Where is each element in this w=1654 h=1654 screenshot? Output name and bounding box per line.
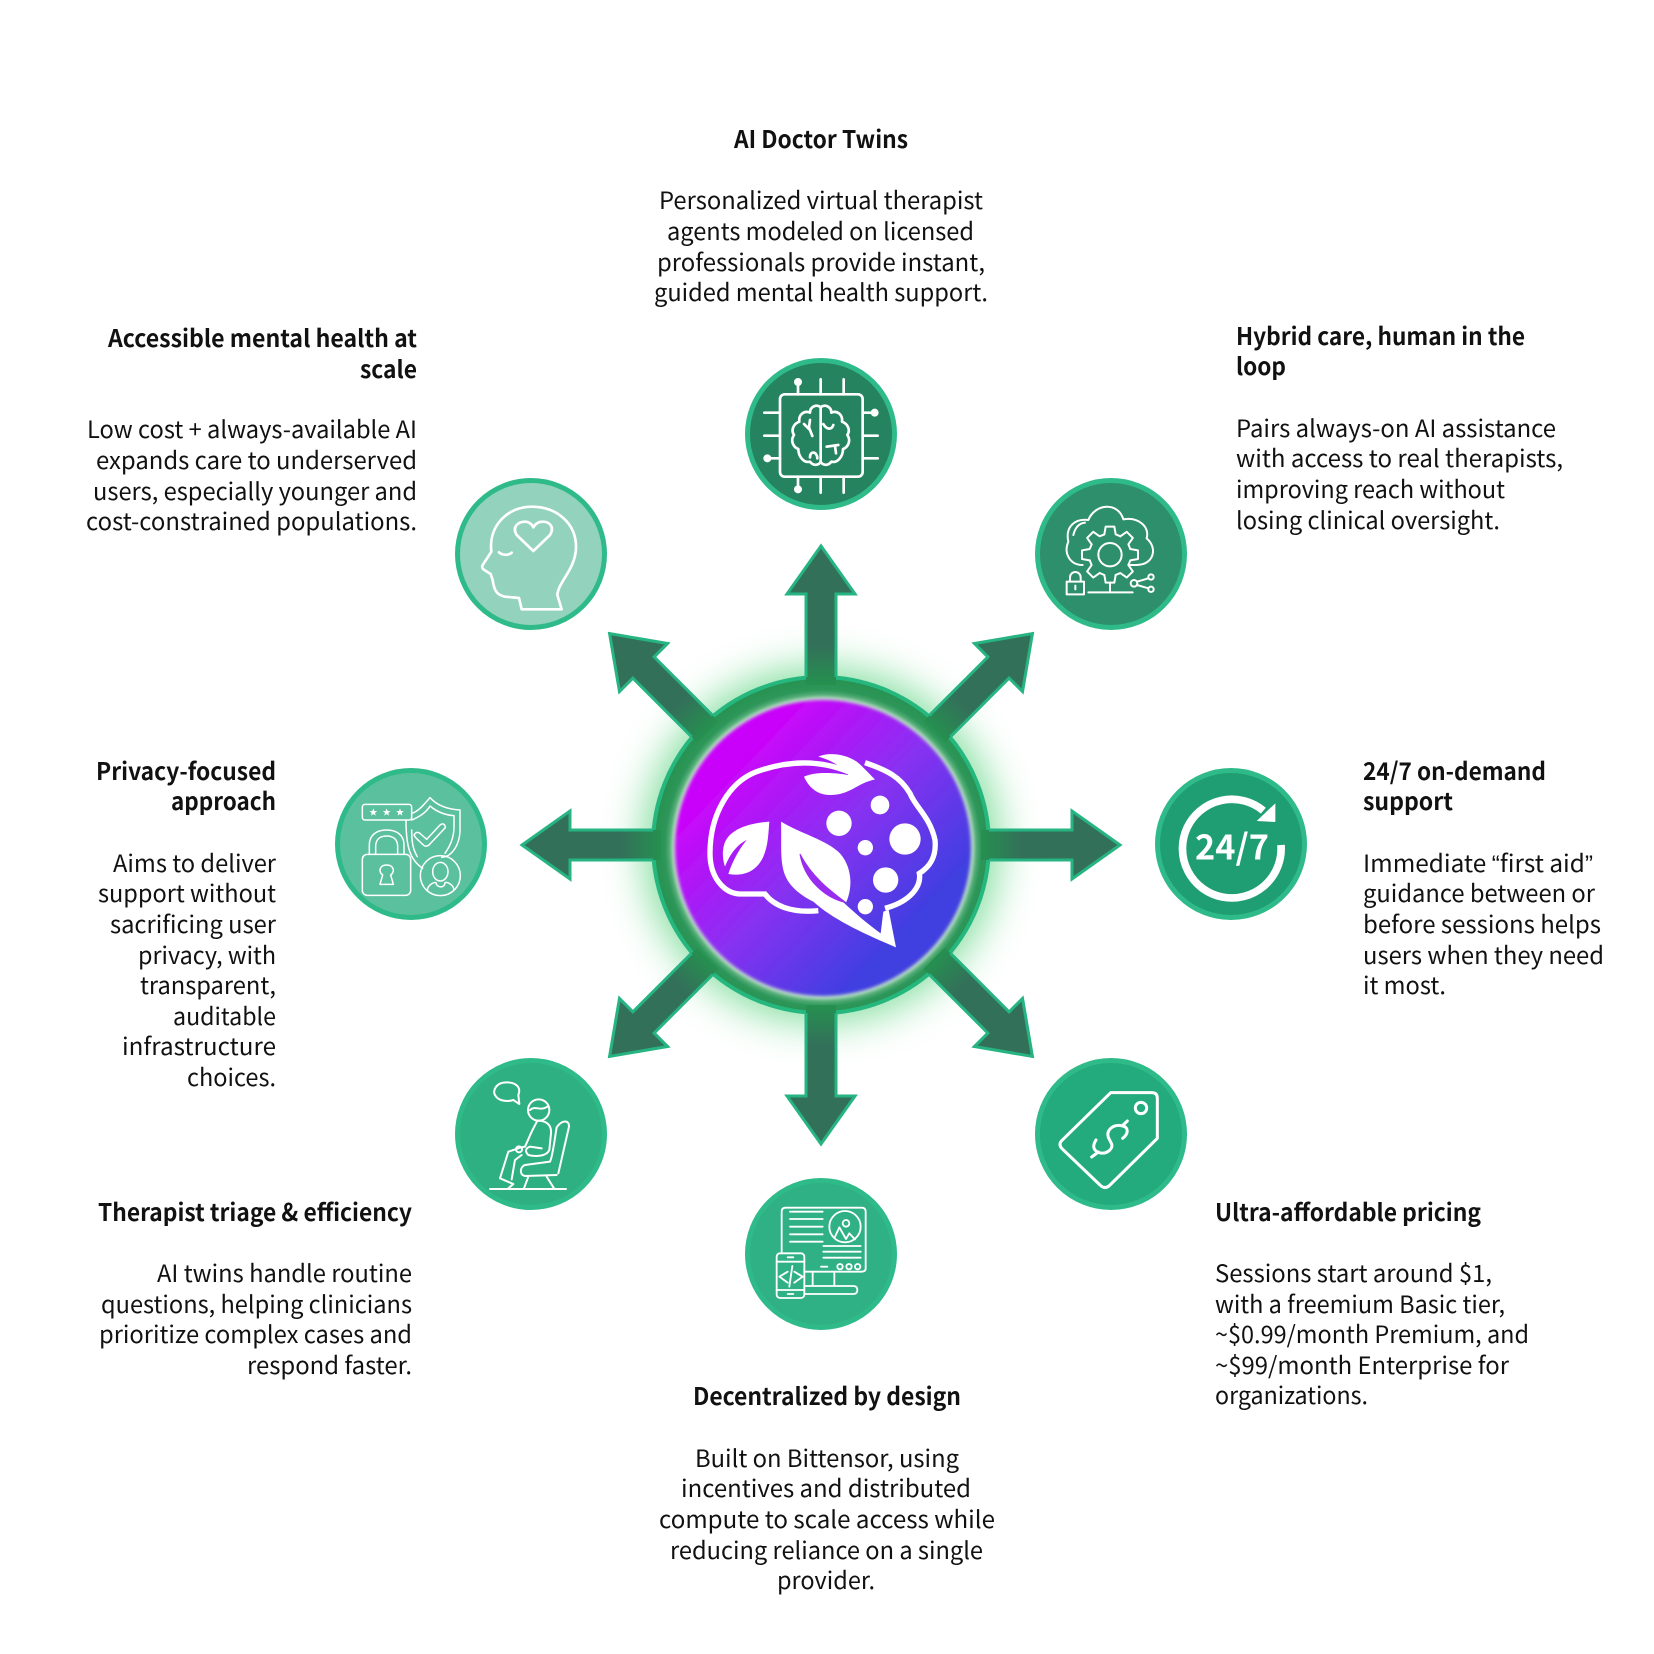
text block: 24/7 on-demand support: guidance between or	[1363, 874, 1596, 909]
heading: 24/7 on-demand support: 24/7 on-demand	[1363, 752, 1546, 787]
text block: Decentralized by design: incentives and distributed	[681, 1469, 971, 1504]
text block: Hybrid care: losing clinical oversight.	[1236, 501, 1500, 536]
arrow: north-west	[586, 610, 732, 756]
central purple disc	[672, 697, 974, 999]
text block: Privacy-focused approach: privacy, with	[138, 936, 276, 971]
icon: AI brain chip	[748, 360, 894, 508]
arrow: south-west	[586, 934, 732, 1080]
arrow: north-east	[910, 610, 1056, 756]
text block: Privacy-focused approach: support without	[98, 874, 276, 909]
heading: Accessible mental health at scale	[107, 319, 417, 385]
heading: Privacy-focused approach	[96, 752, 276, 817]
text block: 24/7 on-demand support: Immediate “first aid”	[1363, 844, 1593, 879]
icon: central brain and leaves logo	[710, 754, 935, 947]
text block: Ultra-affordable pricing: ~$99/month Enterprise for	[1215, 1346, 1510, 1381]
text block: Accessible mental health at scale	[86, 319, 417, 537]
text block: Hybrid care: improving reach without	[1236, 470, 1505, 505]
icon: 24/7 circular arrow	[1158, 770, 1304, 918]
text block: Therapist triage and efficiency	[98, 1193, 412, 1381]
text block: Decentralized by design: compute to scale access while	[659, 1500, 995, 1535]
central hub ring	[653, 677, 989, 1013]
text block: Accessible mental health at scale: expands care to underserved	[96, 441, 417, 476]
arrow: west	[522, 811, 661, 879]
heading: Privacy-focused approach: Privacy-focused	[96, 752, 276, 787]
text block: AI Doctor Twins: agents modeled on licensed	[667, 212, 974, 247]
text block: Decentralized by design	[659, 1377, 995, 1596]
text block: 24/7 on-demand support	[1363, 752, 1604, 1001]
text block: Hybrid care: with access to real therapists,	[1236, 439, 1563, 474]
icon: monitor and phone code	[748, 1180, 894, 1328]
icon: privacy lock and shield	[338, 770, 484, 918]
text block: Hybrid care	[1236, 317, 1563, 536]
text block: Ultra-affordable pricing: with a freemium Basic tier,	[1215, 1285, 1505, 1320]
text block: AI Doctor Twins: guided mental health support.	[654, 273, 988, 308]
heading: Privacy-focused approach: approach	[171, 782, 276, 817]
heading: 24/7 on-demand support	[1363, 752, 1546, 817]
text block: Privacy-focused approach: choices.	[187, 1058, 276, 1093]
text block: 24/7 on-demand support: it most.	[1363, 966, 1446, 1001]
arrow: south	[787, 1005, 855, 1144]
text block: 24/7 on-demand support: users when they need	[1363, 936, 1604, 971]
text block: Ultra-affordable pricing: organizations.	[1215, 1376, 1368, 1411]
central hub glow	[643, 667, 999, 1023]
icon: head with heart	[458, 480, 604, 628]
text block: 24/7 on-demand support: before sessions helps	[1363, 905, 1601, 940]
heading: AI Doctor Twins: AI Doctor Twins	[733, 120, 908, 155]
text block: Therapist triage and efficiency: prioritize complex cases and	[99, 1315, 412, 1350]
heading: Therapist triage & efficiency: Therapist triage & efficiency	[98, 1193, 412, 1228]
icon: dollar price tag	[1038, 1060, 1184, 1208]
text block: Ultra-affordable pricing	[1215, 1193, 1529, 1411]
text block: Decentralized by design: reducing reliance on a single	[670, 1531, 983, 1566]
icon: 24/7 circular arrow: 24/7	[1195, 819, 1269, 869]
arrow: east	[981, 811, 1120, 879]
icon: person seated with speech bubble	[458, 1060, 604, 1208]
heading: Accessible mental health at scale: Accessible mental health at	[107, 319, 417, 354]
text block: Privacy-focused approach	[96, 752, 277, 1093]
text block: Privacy-focused approach: sacrificing user	[110, 905, 277, 940]
text block: Therapist triage and efficiency: AI twins handle routine	[157, 1254, 412, 1289]
heading: Accessible mental health at scale: scale	[360, 350, 417, 385]
heading: Decentralized by design: Decentralized by design	[693, 1377, 961, 1412]
text block: Hybrid care: Pairs always-on AI assistance	[1236, 409, 1556, 444]
heading: Hybrid care, human in the loop: Hybrid care, human in the	[1236, 317, 1525, 352]
icon: cloud gear network	[1038, 480, 1184, 628]
heading: Ultra-affordable pricing: Ultra-affordable pricing	[1215, 1193, 1481, 1228]
heading: Hybrid care, human in the loop: loop	[1236, 347, 1286, 382]
arrow: south-east	[910, 934, 1056, 1080]
text block: Privacy-focused approach: transparent,	[140, 966, 276, 1001]
text block: Ultra-affordable pricing: Sessions start around $1,	[1215, 1254, 1492, 1289]
text block: Ultra-affordable pricing: ~$0.99/month Premium, and	[1215, 1315, 1529, 1350]
text block: AI Doctor Twins: professionals provide instant,	[657, 243, 985, 278]
text block: Decentralized by design: Built on Bittensor, using	[695, 1439, 959, 1474]
text block: Privacy-focused approach: infrastructure	[122, 1027, 276, 1062]
text block: Therapist triage and efficiency: respond faster.	[247, 1346, 412, 1381]
heading: Hybrid care, human in the loop	[1236, 317, 1525, 382]
text block: Privacy-focused approach: auditable	[173, 997, 276, 1032]
text block: Accessible mental health at scale: users, especially younger and	[93, 472, 417, 507]
text block: Accessible mental health at scale: cost-constrained populations.	[86, 502, 417, 537]
text block: Therapist triage and efficiency: questions, helping clinicians	[101, 1285, 412, 1320]
text block: Accessible mental health at scale: Low cost + always-available AI	[87, 410, 417, 445]
text block: AI Doctor Twins	[654, 120, 988, 308]
heading: 24/7 on-demand support: support	[1363, 782, 1453, 817]
text block: Privacy-focused approach: Aims to deliver	[113, 844, 277, 879]
text block: AI Doctor Twins: Personalized virtual therapist	[659, 181, 983, 216]
text block: Decentralized by design: provider.	[777, 1561, 875, 1596]
arrow: north	[787, 546, 855, 685]
